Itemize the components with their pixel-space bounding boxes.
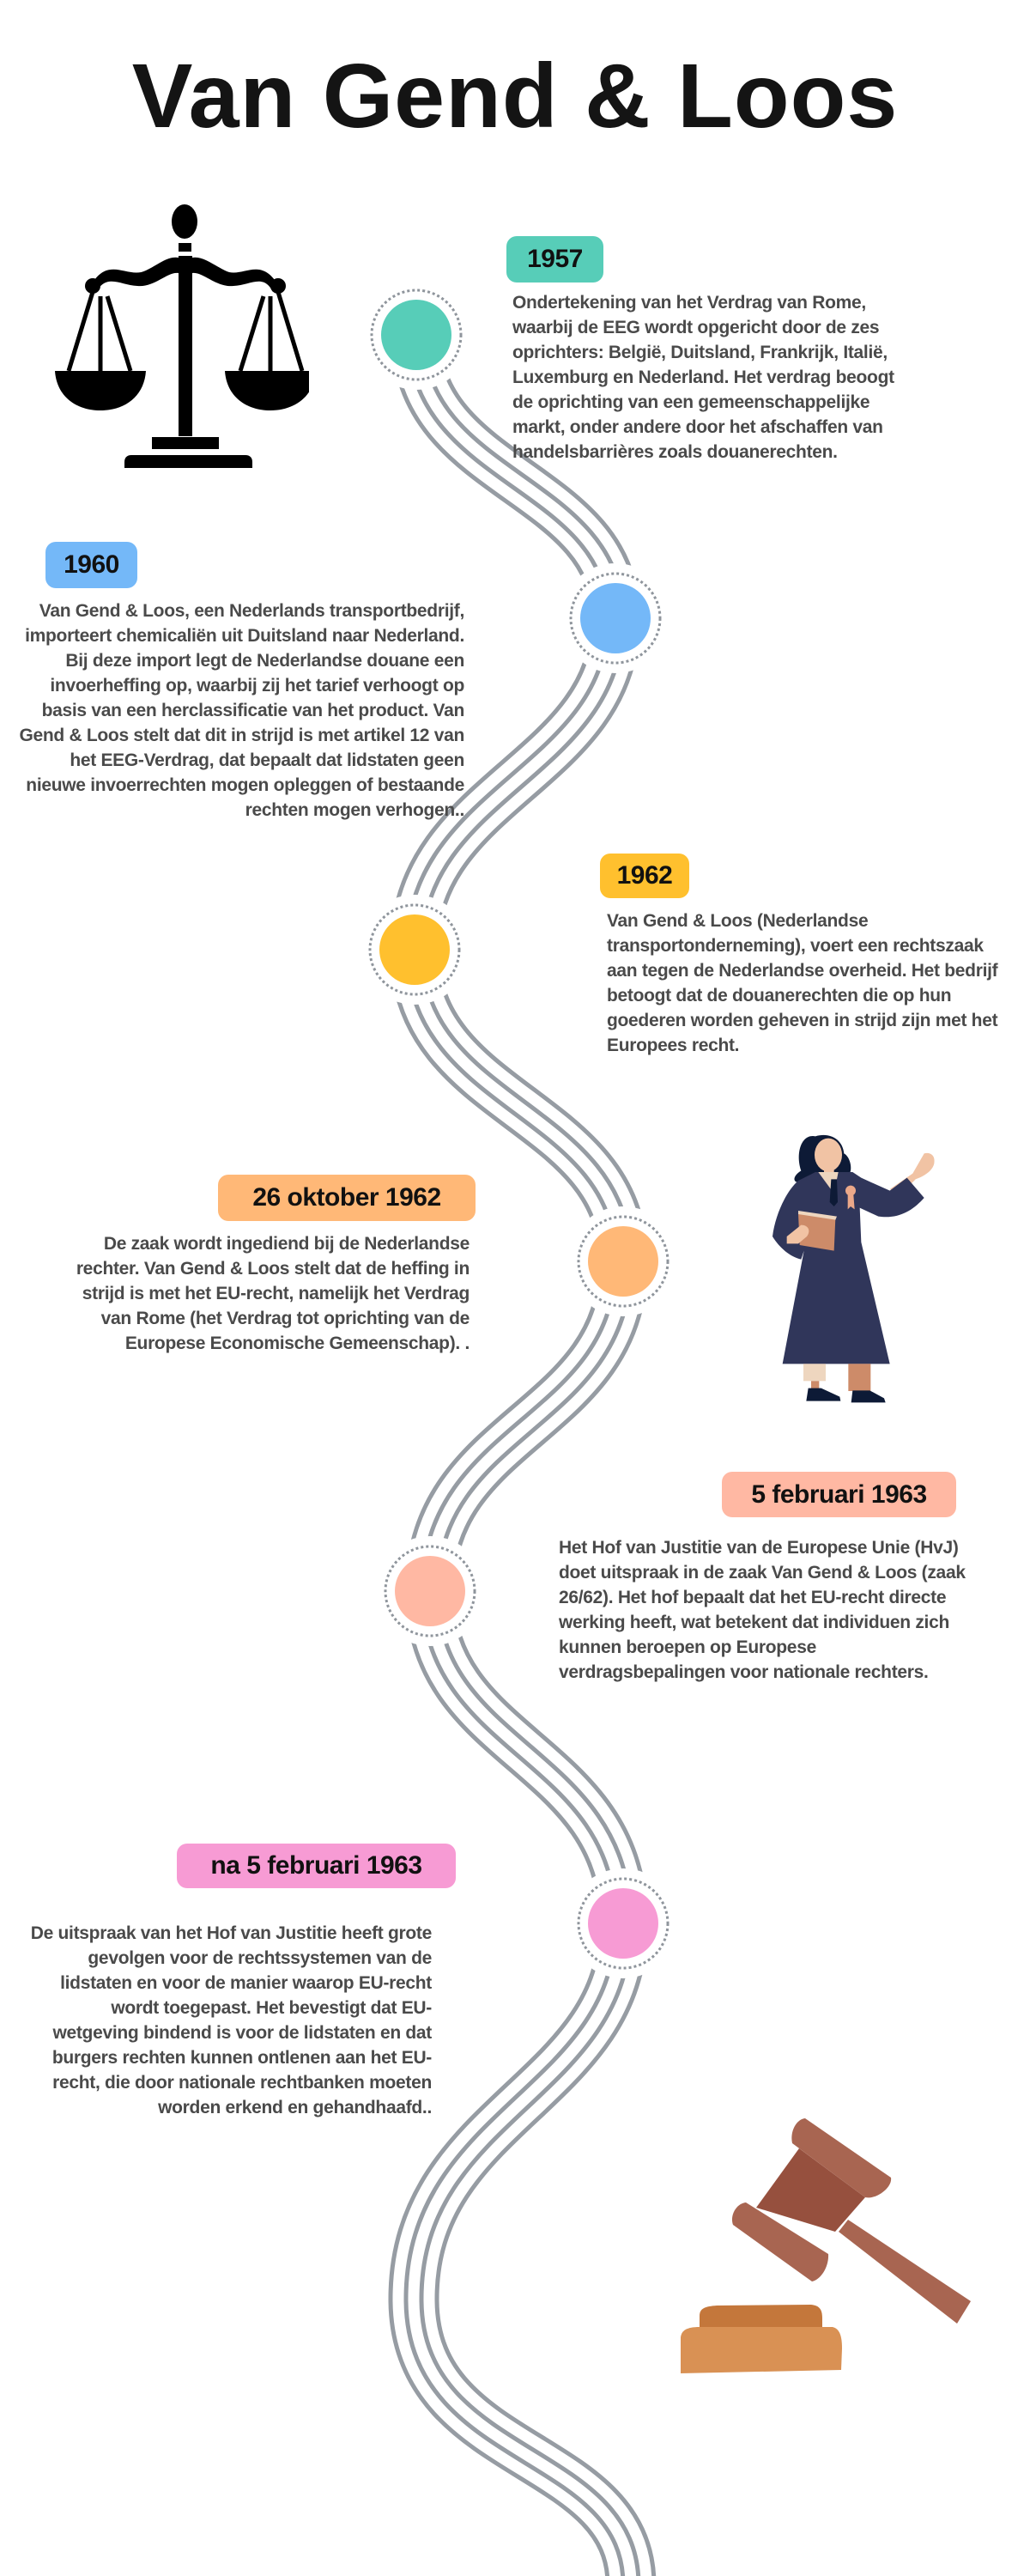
- text: 5 februari 1963: doet uitspraak in de zaak Van Gend & Loos (zaak: [559, 1563, 966, 1583]
- text: 1960: basis van een herclassificatie van het product. Van: [42, 701, 464, 720]
- text: 5 februari 1963: Het Hof van Justitie van de Europese Unie (HvJ): [559, 1538, 959, 1558]
- text: 26 oktober 1962: De zaak wordt ingediend bij de Nederlandse: [104, 1234, 470, 1254]
- text: 1960: Gend & Loos stelt dat dit in strijd is met artikel 12 van: [19, 726, 464, 745]
- node na 5 februari 1963: [568, 1868, 678, 1978]
- text: 1957: oprichters: België, Duitsland, Frankrijk, Italië,: [512, 343, 888, 362]
- text: 1957: handelsbarrières zoals douanerechten.: [512, 442, 838, 462]
- label: 26 oktober 1962: [218, 1175, 476, 1221]
- text: 1962: Van Gend & Loos (Nederlandse: [607, 911, 868, 931]
- text: 5 februari 1963: [559, 1538, 966, 1682]
- text: 26 oktober 1962: Europese Economische Gemeenschap). .: [125, 1334, 470, 1353]
- text: 1960: het EEG-Verdrag, dat bepaalt dat lidstaten geen: [70, 750, 464, 770]
- label: 1962: [600, 854, 689, 898]
- text: 26 oktober 1962: strijd is met het EU-recht, namelijk het Verdrag: [82, 1284, 470, 1303]
- label: 5 februari 1963: [722, 1472, 956, 1517]
- text: na 5 februari 1963: recht, die door nationale rechtbanken moeten: [52, 2073, 432, 2093]
- text: 1962: Europees recht.: [607, 1036, 739, 1055]
- text: 26 oktober 1962: rechter. Van Gend & Loos stelt dat de heffing in: [76, 1259, 470, 1279]
- text: 1957: Luxemburg en Nederland. Het verdrag beoogt: [512, 368, 894, 387]
- text: 1957: de oprichting van een gemeenschappelijke: [512, 392, 869, 412]
- text: na 5 februari 1963: wordt toegepast. Het bevestigt dat EU-: [111, 1998, 432, 2018]
- text: na 5 februari 1963: [31, 1923, 432, 2117]
- label: na 5 februari 1963: [177, 1844, 456, 1888]
- title: Van Gend & Loos: [132, 46, 898, 147]
- text: 5 februari 1963: 26/62). Het hof bepaalt dat het EU-recht directe: [559, 1588, 946, 1607]
- text: 5 februari 1963: verdragsbepalingen voor nationale rechters.: [559, 1662, 929, 1682]
- text: na 5 februari 1963: gevolgen voor de rechtssystemen van de: [88, 1948, 432, 1968]
- text: 1960: [19, 601, 464, 820]
- text: 26 oktober 1962: [76, 1234, 470, 1353]
- label: 1957: [506, 236, 603, 283]
- label: 1962: 1962: [617, 861, 672, 890]
- text: 5 februari 1963: kunnen beroepen op Europese: [559, 1637, 816, 1657]
- text: 1960: rechten mogen verhogen..: [245, 800, 464, 820]
- text: 1957: [512, 293, 894, 462]
- text: 1960: importeert chemicaliën uit Duitsland naar Nederland.: [25, 626, 464, 646]
- text: na 5 februari 1963: burgers rechten kunnen ontlenen aan het EU-: [52, 2048, 432, 2068]
- text: 1960: Van Gend & Loos, een Nederlands transportbedrijf,: [39, 601, 464, 621]
- text: 1960: Bij deze import legt de Nederlandse douane een: [65, 651, 464, 671]
- text: na 5 februari 1963: wetgeving bindend is voor de lidstaten en dat: [52, 2023, 432, 2043]
- label: 1960: 1960: [64, 550, 119, 579]
- node 1957: [361, 280, 471, 390]
- text: 1957: markt, onder andere door het afschaffen van: [512, 417, 883, 437]
- text: 1960: invoerheffing op, waarbij zij het tarief verhoogt op: [50, 676, 464, 696]
- text: na 5 februari 1963: De uitspraak van het Hof van Justitie heeft grote: [31, 1923, 432, 1943]
- label: na 5 februari 1963: na 5 februari 1963: [210, 1851, 422, 1880]
- node 5 februari 1963: [375, 1536, 485, 1646]
- text: 1960: nieuwe invoerrechten mogen opleggen of bestaande: [26, 775, 464, 795]
- illustration: woman lawyer: [772, 1135, 935, 1403]
- icon: scales of justice: [55, 204, 309, 468]
- text: 1957: Ondertekening van het Verdrag van Rome,: [512, 293, 866, 313]
- label: 1960: [45, 542, 137, 588]
- text: 1962: transportonderneming), voert een rechtszaak: [607, 936, 984, 956]
- label: 1957: 1957: [527, 245, 583, 273]
- text: 1962: betoogt dat de douanerechten die op hun: [607, 986, 951, 1005]
- text: na 5 februari 1963: worden erkend en gehandhaafd..: [158, 2098, 432, 2117]
- text: 1962: [607, 911, 998, 1055]
- node 26 oktober 1962: [568, 1206, 678, 1316]
- text: 1957: waarbij de EEG wordt opgericht door de zes: [512, 318, 879, 337]
- text: 5 februari 1963: werking heeft, wat betekent dat individuen zich: [559, 1613, 949, 1632]
- node 1962: [360, 895, 470, 1005]
- label: 26 oktober 1962: 26 oktober 1962: [252, 1183, 441, 1212]
- text: 1962: aan tegen de Nederlandse overheid. Het bedrijf: [607, 961, 997, 981]
- text: na 5 februari 1963: lidstaten en voor de manier waarop EU-recht: [60, 1973, 432, 1993]
- label: 5 februari 1963: 5 februari 1963: [751, 1480, 927, 1508]
- text: 26 oktober 1962: van Rome (het Verdrag tot oprichting van de: [101, 1309, 470, 1328]
- icon: gavel: [681, 2118, 971, 2373]
- text: 1962: goederen worden geheven in strijd zijn met het: [607, 1011, 997, 1030]
- node 1960: [560, 563, 670, 673]
